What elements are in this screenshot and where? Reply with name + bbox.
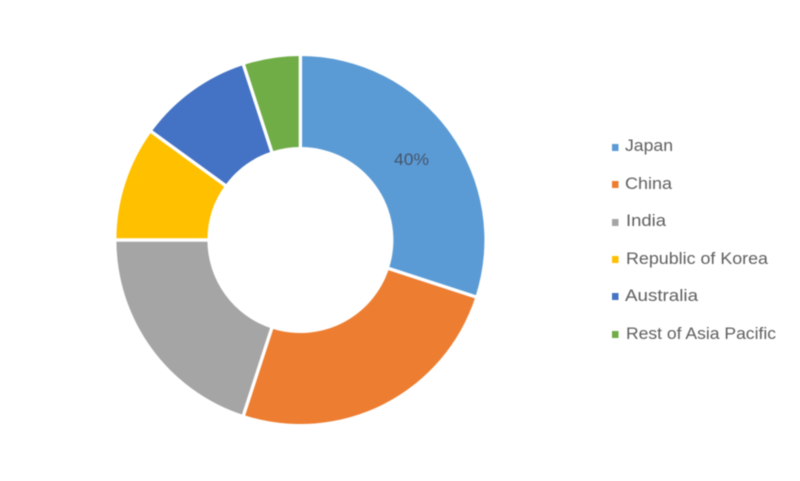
legend <box>612 136 777 343</box>
legend item: India: India <box>626 211 667 230</box>
segment: China <box>244 269 475 424</box>
segment: India <box>116 240 272 415</box>
data label: 40%: 40% <box>394 150 429 169</box>
segment: Republic of Korea <box>116 132 225 240</box>
segment: Japan <box>300 56 484 297</box>
segment: Rest of Asia Pacific <box>244 56 300 152</box>
legend item: Rest of Asia Pacific: Rest of Asia Pacific <box>626 324 777 343</box>
legend item: Japan: Japan <box>625 136 673 155</box>
segment: Australia <box>152 65 272 185</box>
legend item: Republic of Korea: Republic of Korea <box>626 249 769 268</box>
legend item: India <box>612 211 667 230</box>
legend item: Australia: Australia <box>625 286 699 305</box>
donut chart <box>110 50 484 424</box>
legend item: China: China <box>625 174 673 193</box>
